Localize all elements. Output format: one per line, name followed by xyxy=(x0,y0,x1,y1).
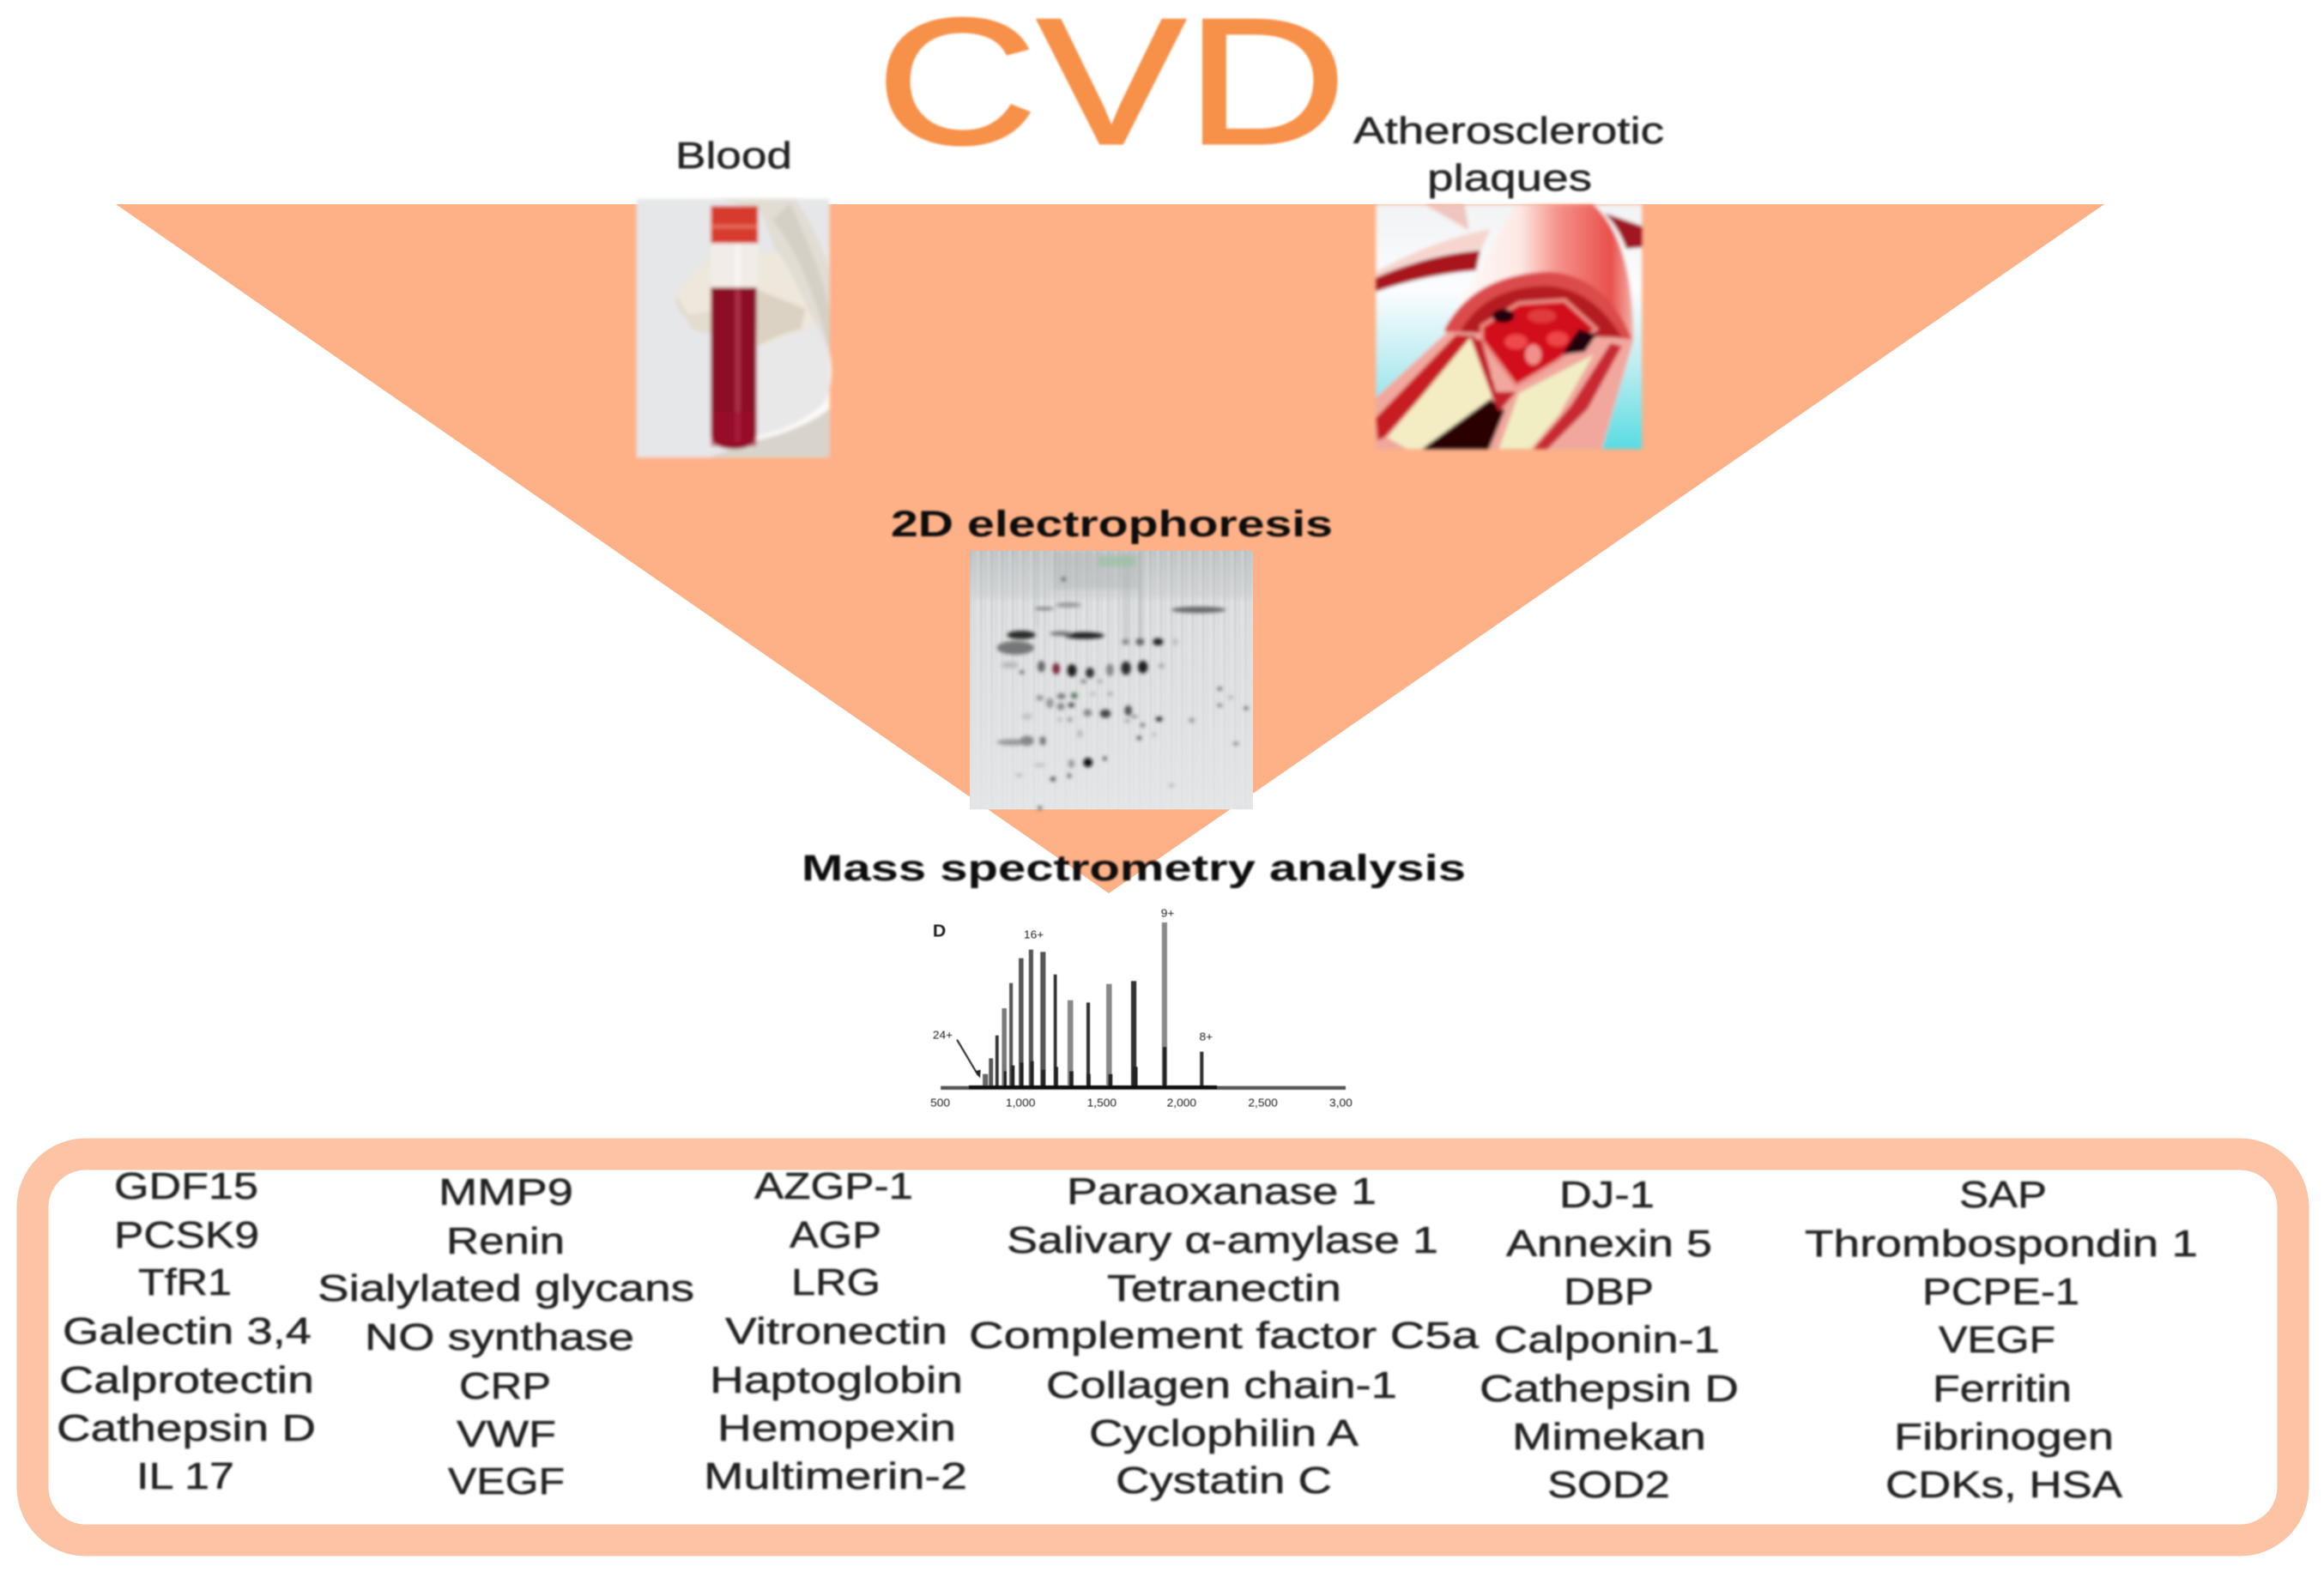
column 1 xyxy=(57,1165,316,1497)
label: atherosclerotic plaques: plaques xyxy=(1427,157,1592,199)
column 1: TfR1 xyxy=(138,1261,232,1303)
chart: mass spectrum: 16+ xyxy=(1024,928,1044,940)
image: blood test tube in gloved hand xyxy=(637,199,832,457)
chart: mass spectrum: 1,500 xyxy=(1087,1097,1117,1109)
column 5: Calponin-1 xyxy=(1494,1319,1720,1361)
column 3: AZGP-1 xyxy=(754,1165,913,1207)
column 4: Tetranectin xyxy=(1107,1267,1341,1309)
column 2: VEGF xyxy=(448,1460,565,1502)
label: atherosclerotic plaques: Atherosclerotic xyxy=(1353,110,1664,152)
column 5: DJ-1 xyxy=(1559,1174,1655,1216)
column 4: Cystatin C xyxy=(1116,1460,1332,1502)
column 3: Vitronectin xyxy=(725,1310,947,1352)
column 1: PCSK9 xyxy=(114,1214,259,1256)
column 4 xyxy=(969,1170,1480,1502)
column 1: Galectin 3,4 xyxy=(63,1310,312,1352)
chart: mass spectrum xyxy=(930,907,1353,1109)
column 3: Hemopexin xyxy=(717,1407,956,1449)
chart: mass spectrum: 8+ xyxy=(1200,1031,1213,1043)
column 6: Thrombospondin 1 xyxy=(1805,1223,2198,1265)
panel frame xyxy=(33,1154,2293,1540)
column 2 xyxy=(318,1171,694,1502)
chart: mass spectrum: 3,00 xyxy=(1329,1097,1353,1109)
column 6: Ferritin xyxy=(1933,1368,2072,1410)
column 2: NO synthase xyxy=(365,1316,634,1358)
column 3: LRG xyxy=(791,1261,881,1303)
column 2: CRP xyxy=(459,1365,551,1407)
heading: mass spectrometry analysis: Mass spectrometry analysis xyxy=(802,848,1466,889)
column 6: SAP xyxy=(1959,1174,2047,1216)
heading: 2D electrophoresis: 2D electrophoresis xyxy=(891,504,1333,545)
chart: mass spectrum: 2,500 xyxy=(1248,1097,1278,1109)
column 4: Complement factor C5a xyxy=(969,1315,1480,1357)
column 3: Multimerin-2 xyxy=(704,1455,967,1497)
column 5: DBP xyxy=(1564,1271,1654,1313)
chart: mass spectrum: 24+ xyxy=(933,1029,953,1042)
column 2: MMP9 xyxy=(439,1171,573,1213)
label: blood: Blood xyxy=(675,135,792,177)
column 1: IL 17 xyxy=(136,1455,234,1497)
chart: mass spectrum: 500 xyxy=(930,1097,950,1109)
column 6: Fibrinogen xyxy=(1894,1416,2114,1458)
funnel triangle xyxy=(116,204,2104,893)
column 1: Cathepsin D xyxy=(57,1407,316,1449)
label: atherosclerotic plaques xyxy=(1353,110,1664,199)
chart: mass spectrum: D xyxy=(933,922,946,941)
column 3: AGP xyxy=(790,1214,881,1256)
column 1: GDF15 xyxy=(114,1165,258,1207)
column 4: Collagen chain-1 xyxy=(1046,1364,1397,1406)
column 5: Annexin 5 xyxy=(1506,1223,1712,1265)
chart: mass spectrum: 9+ xyxy=(1161,907,1175,919)
column 3 xyxy=(704,1165,967,1497)
panel: biomarker list xyxy=(33,1154,2293,1540)
image: atherosclerotic artery cross-section xyxy=(1376,204,1642,449)
column 4: Cyclophilin A xyxy=(1089,1412,1359,1454)
column 5 xyxy=(1480,1174,1739,1506)
column 6: PCPE-1 xyxy=(1922,1271,2079,1313)
column 4: Paraoxanase 1 xyxy=(1067,1170,1377,1212)
column 5: Mimekan xyxy=(1512,1416,1706,1458)
column 2: Renin xyxy=(446,1220,565,1262)
column 5: Cathepsin D xyxy=(1480,1368,1739,1410)
column 4: Salivary α-amylase 1 xyxy=(1007,1219,1438,1261)
chart: mass spectrum: 2,000 xyxy=(1167,1097,1196,1109)
column 6: CDKs, HSA xyxy=(1885,1464,2123,1506)
image: 2D electrophoresis gel xyxy=(970,551,1253,810)
column 5: SOD2 xyxy=(1547,1464,1670,1506)
column 2: VWF xyxy=(457,1413,556,1455)
column 3: Haptoglobin xyxy=(710,1359,963,1401)
column 6: VEGF xyxy=(1939,1319,2055,1361)
column 6 xyxy=(1805,1174,2198,1506)
column 2: Sialylated glycans xyxy=(318,1267,694,1309)
chart: mass spectrum: 1,000 xyxy=(1006,1097,1035,1109)
column 1: Calprotectin xyxy=(59,1359,314,1401)
